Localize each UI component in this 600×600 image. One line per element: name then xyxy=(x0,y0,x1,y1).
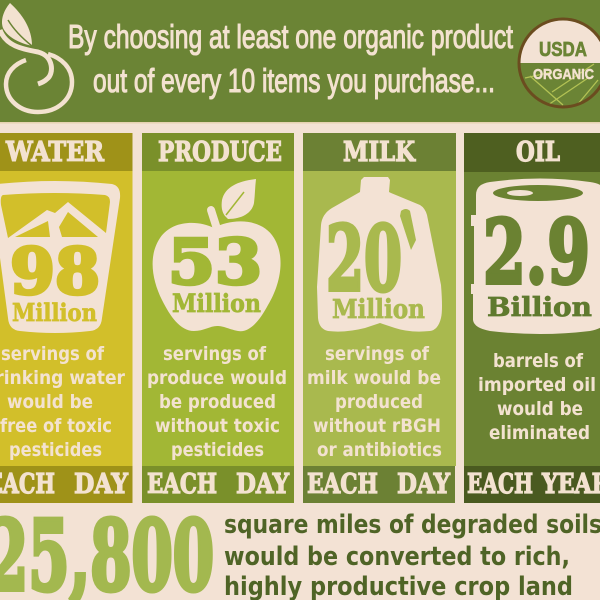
text: oil description: eliminated xyxy=(489,422,590,444)
panel title: water: WATER xyxy=(5,137,104,168)
label: each day xyxy=(147,469,290,500)
text: oil description: barrels of xyxy=(493,350,584,372)
text: produce description: pesticides xyxy=(171,439,264,461)
text: water description: free of toxic xyxy=(0,415,112,437)
text: produce description xyxy=(147,343,287,461)
label: each year xyxy=(467,469,600,500)
icon: milk jug: Million xyxy=(332,295,425,325)
panel title: produce: PRODUCE xyxy=(158,137,282,168)
icon: apple xyxy=(153,179,281,331)
panel: produce xyxy=(142,133,294,503)
icon: USDA organic seal xyxy=(519,19,600,107)
text: oil description: would be xyxy=(497,398,583,420)
text: oil description xyxy=(478,350,596,444)
icon: glass of water: 98 xyxy=(10,234,100,310)
icon: USDA organic seal: USDA xyxy=(539,39,587,61)
panel: water xyxy=(0,133,132,503)
icon: oil barrel: Billion xyxy=(487,293,592,323)
text: produce description: without toxic xyxy=(155,415,280,437)
label: each day xyxy=(0,469,129,500)
label: each day: DAY xyxy=(236,469,290,500)
panel title: oil: OIL xyxy=(516,137,560,168)
icon: glass of water xyxy=(0,181,120,333)
icon: apple: 53 xyxy=(168,226,262,298)
text: soil conversion statement xyxy=(224,510,600,600)
text: water description: servings of xyxy=(1,343,105,365)
label: each day: DAY xyxy=(397,469,451,500)
text: produce description: servings of xyxy=(163,343,267,365)
icon: milk jug: 20 xyxy=(326,206,402,312)
icon: leaf and swirl logo xyxy=(0,3,72,112)
text: milk description: without rBGH xyxy=(313,415,441,437)
label: each day: EACH xyxy=(147,469,217,500)
header banner xyxy=(0,0,600,124)
heading xyxy=(68,18,513,99)
text: milk description xyxy=(307,343,442,461)
text: water description: would be xyxy=(7,391,93,413)
icon: glass of water: Million xyxy=(12,298,97,327)
text: milk description: milk would be xyxy=(307,367,441,389)
text: water description xyxy=(0,343,126,461)
label: each day: DAY xyxy=(74,469,129,500)
panel: oil xyxy=(464,133,600,503)
text: milk description: or antibiotics xyxy=(317,439,442,461)
text: milk description: servings of xyxy=(325,343,430,365)
icon: apple: Million xyxy=(172,289,261,318)
icon: oil barrel xyxy=(471,178,600,334)
label: each year: EACH xyxy=(467,469,533,500)
label: each day: EACH xyxy=(307,469,378,500)
text: produce description: produce would xyxy=(147,367,287,389)
icon: milk jug xyxy=(317,177,442,332)
panel title: milk: MILK xyxy=(343,137,416,168)
text: produce description: be produced xyxy=(159,391,276,413)
panel: milk xyxy=(303,133,456,503)
text: milk description: produced xyxy=(335,391,423,413)
label: each day xyxy=(307,469,451,500)
text: water description: pesticides xyxy=(9,439,102,461)
